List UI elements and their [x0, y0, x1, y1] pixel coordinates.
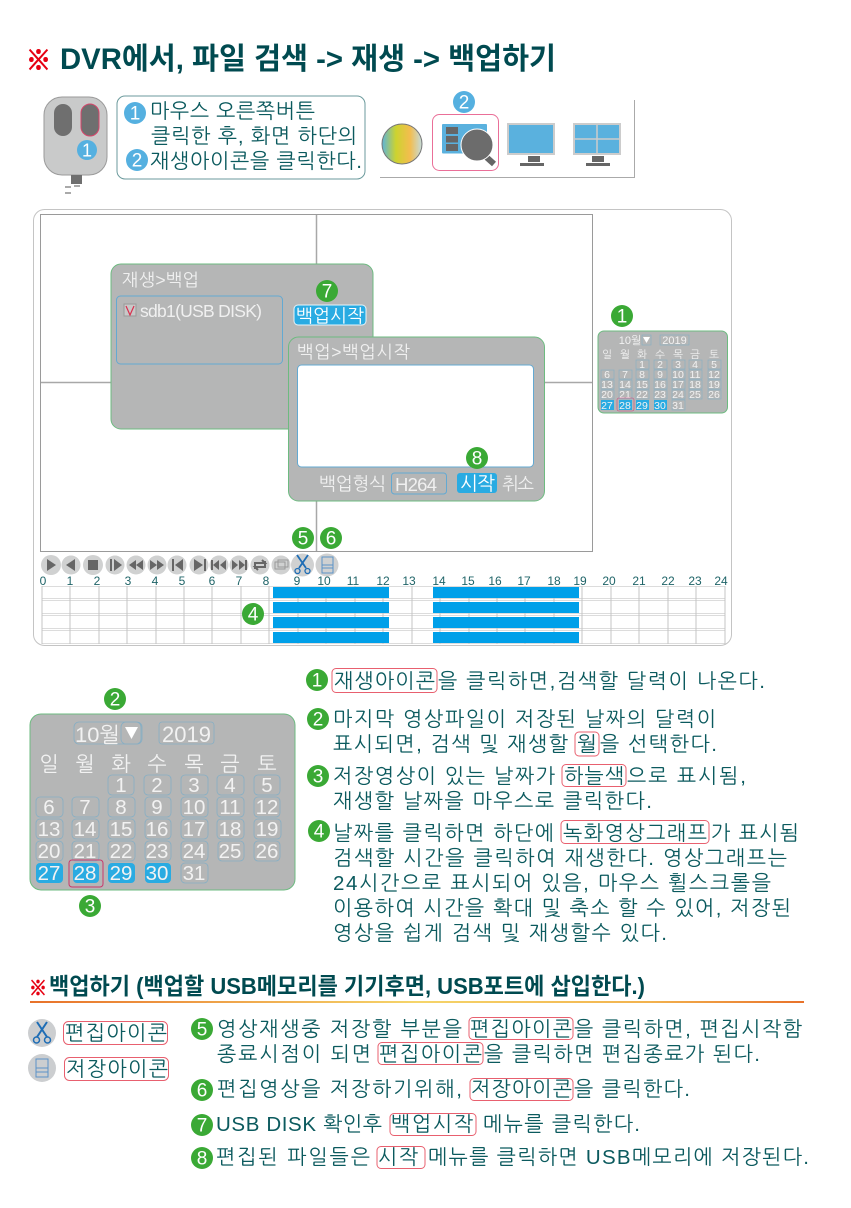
calendar: large: 29 — [110, 862, 132, 885]
panel: backup start dialog: H264 — [395, 474, 437, 495]
text block: step 3: 저장영상이 있는 날짜가 — [333, 765, 556, 788]
calendar: small: 27 — [601, 400, 613, 412]
calendar: large: 26 — [256, 840, 278, 863]
calendar: large: 목 — [184, 753, 204, 776]
badge 2 — [104, 688, 126, 710]
text block: step 2: 마지막 영상파일이 저장된 날짜의 달력이 — [333, 708, 716, 731]
text block: step 5: 을 클릭하면, 편집시작함 — [574, 1018, 803, 1041]
calendar: small: 21 — [619, 389, 631, 401]
calendar: small: 13 — [601, 379, 613, 391]
panel: playback icon bar — [380, 91, 634, 178]
legend: save icon — [28, 1054, 168, 1082]
text block: step 4 — [308, 820, 799, 945]
text block: step 8: 8 — [197, 1148, 207, 1170]
calendar: large: 수 — [147, 753, 167, 776]
calendar: large: 17 — [183, 818, 205, 841]
panel: backup start dialog: 시작 — [460, 474, 495, 495]
chart: hour scale: 10 — [317, 574, 331, 588]
chart: recording timeline — [42, 586, 725, 644]
callout: mouse instruction: 2 — [132, 150, 142, 172]
calendar: large: 23 — [146, 840, 168, 863]
calendar: small: 16 — [654, 379, 666, 391]
calendar: large: 6 — [43, 796, 55, 819]
icon: quad monitor — [574, 124, 620, 166]
text block: step 4: 4 — [314, 822, 325, 842]
calendar: large: 19 — [256, 818, 278, 841]
chart: hour scale: 2 — [94, 574, 101, 588]
text block: step 1 — [306, 668, 765, 693]
calendar: small: 17 — [672, 379, 684, 391]
calendar: small: 2 — [657, 359, 663, 371]
text block: step 3: 으로 표시됨, — [627, 765, 746, 788]
chart: hour scale: 12 — [376, 574, 390, 588]
calendar: small: 12 — [708, 369, 720, 381]
calendar: small: 15 — [636, 379, 648, 391]
badge 6: 6 — [326, 528, 336, 550]
calendar: large: 14 — [74, 818, 96, 841]
badge 5: 5 — [298, 528, 308, 550]
badge 2: 2 — [110, 690, 120, 710]
callout: mouse instruction: 마우스 오른쪽버튼 — [150, 100, 315, 123]
panel: backup start dialog: 취소 — [502, 474, 534, 494]
calendar: small: 20 — [601, 389, 613, 401]
calendar: large: 31 — [183, 862, 205, 885]
panel: backup dialog: 7 — [322, 282, 332, 302]
text block: step 6: 6 — [197, 1080, 207, 1102]
text block: step 4: 24시간으로 표시되어 있음, 마우스 휠스크롤을 — [333, 872, 771, 895]
calendar: large: 15 — [110, 818, 132, 841]
chart: hour scale: 13 — [402, 574, 416, 588]
calendar: large: 3 — [188, 774, 200, 797]
text block: step 1: 1 — [312, 670, 322, 692]
calendar: small: 토 — [709, 349, 719, 361]
calendar: large: 12 — [256, 796, 278, 819]
text block: step 4: 녹화영상그래프 — [563, 822, 707, 845]
chart: hour scale: 22 — [661, 574, 675, 588]
calendar: large: 20 — [38, 840, 60, 863]
calendar: large: 21 — [74, 840, 96, 863]
calendar: large: 금 — [220, 753, 240, 776]
chart: hour scale: 11 — [347, 574, 360, 588]
calendar: large: 5 — [261, 774, 273, 797]
chart: hour scale: 3 — [125, 574, 132, 588]
calendar: small: 29 — [636, 400, 648, 412]
callout: mouse instruction: 재생아이콘을 클릭한다. — [150, 150, 362, 173]
panel: backup dialog — [111, 264, 373, 429]
text block: step 4: 날짜를 클릭하면 하단에 — [333, 822, 554, 845]
panel: backup start dialog: 백업형식 — [319, 474, 386, 494]
panel: backup start dialog: 8 — [472, 448, 482, 470]
text block: step 5: 영상재생중 저장할 부분을 — [217, 1018, 462, 1041]
calendar: small: 14 — [619, 379, 631, 391]
panel: backup start dialog: 백업>백업시작 — [297, 342, 410, 362]
panel: backup dialog: sdb1(USB DISK) — [140, 301, 262, 321]
calendar: large: 16 — [146, 818, 168, 841]
chart: hour scale: 24 — [714, 574, 728, 588]
chart: hour scale: 17 — [517, 574, 531, 588]
chart: hour scale: 6 — [209, 574, 216, 588]
legend: edit icon: 편집아이콘 — [65, 1022, 167, 1045]
calendar: large: 2 — [151, 774, 163, 797]
calendar: small — [598, 331, 728, 413]
legend: edit icon — [28, 1019, 168, 1047]
calendar: small: 9 — [657, 369, 663, 381]
text block: step 4: 이용하여 시간을 확대 및 축소 할 수 있어, 저장된 — [333, 897, 791, 920]
calendar: small: 금 — [690, 349, 700, 361]
badge 3: 3 — [85, 896, 95, 918]
chart: hour scale: 19 — [573, 574, 587, 588]
calendar: small: 화 — [637, 349, 647, 361]
chart: hour scale: 7 — [236, 574, 243, 588]
title: DVR에서, 파일 검색 -> 재생 -> 백업하기 — [60, 43, 556, 76]
badge 1 — [611, 305, 633, 328]
text block: step 3: 하늘색 — [564, 765, 624, 788]
text block: step 4: 가 표시됨 — [711, 822, 799, 845]
chart: recording timeline: 4 — [248, 604, 259, 626]
chart: hour scale: 5 — [179, 574, 186, 588]
calendar: large: 27 — [38, 862, 60, 885]
icon: color wheel — [382, 124, 422, 164]
calendar: small: 24 — [672, 389, 684, 401]
calendar: large: 8 — [115, 796, 127, 819]
chart: hour scale: 1 — [67, 574, 74, 588]
text block: step 4: 검색할 시간을 클릭하여 재생한다. 영상그래프는 — [333, 847, 787, 870]
text block: step 2: 2 — [313, 710, 323, 730]
calendar: small: 4 — [692, 359, 698, 371]
text block: step 2: 을 선택한다. — [600, 733, 717, 756]
panel: DVR screen — [34, 210, 732, 646]
calendar: small: 26 — [708, 389, 720, 401]
text block: step 6: 편집영상을 저장하기위해, — [217, 1078, 462, 1101]
calendar: large: 월 — [75, 753, 95, 776]
calendar: small: 10월 — [619, 334, 641, 347]
calendar: small: 19 — [708, 379, 720, 391]
calendar: large: 9 — [151, 796, 163, 819]
badge 1: 1 — [617, 306, 627, 328]
calendar: small: 8 — [639, 369, 645, 381]
calendar: small: 1 — [639, 359, 645, 371]
chart: hour scale: 15 — [461, 574, 475, 588]
badge 5 — [292, 527, 314, 550]
calendar: small: 2019 — [662, 335, 687, 347]
badge 6 — [320, 527, 342, 550]
chart: hour scale: 20 — [602, 574, 616, 588]
badge 2 — [453, 91, 475, 114]
heading: backup: 백업하기 (백업할 USB메모리를 기기후면, USB포트에 삽입한다.) — [49, 973, 645, 999]
calendar: small: 5 — [711, 359, 717, 371]
panel: backup dialog: 백업시작 — [296, 306, 364, 326]
calendar: large: 18 — [219, 818, 241, 841]
icon: mouse: 1 — [82, 140, 92, 160]
calendar: large: 화 — [111, 753, 131, 776]
panel: backup dialog: 재생>백업 — [122, 270, 199, 290]
toolbar: playback controls — [41, 554, 338, 576]
text block: step 3: 재생할 날짜을 마우스로 클릭한다. — [333, 790, 652, 813]
text block: step 5: 편집아이콘 — [470, 1018, 572, 1041]
callout: mouse instruction: 클릭한 후, 화면 하단의 — [151, 125, 357, 148]
chart: hour scale: 21 — [632, 574, 646, 588]
chart: hour scale: 14 — [432, 574, 446, 588]
text block: step 5 — [191, 1018, 803, 1066]
calendar: large: 4 — [224, 774, 236, 797]
text block: step 1: 을 클릭하면,검색할 달력이 나온다. — [438, 670, 765, 693]
calendar: large: 30 — [146, 862, 168, 885]
calendar: small: 3 — [675, 359, 681, 371]
chart: hour scale: 9 — [294, 574, 301, 588]
chart: hour scale: 4 — [152, 574, 159, 588]
calendar: small: 7 — [622, 369, 628, 381]
text block: step 4: 영상을 쉽게 검색 및 재생할수 있다. — [333, 922, 667, 945]
calendar: large: 10 — [183, 796, 205, 819]
badge 3 — [79, 895, 101, 918]
text block: step 6: 저장아이콘 — [471, 1078, 572, 1101]
text block: step 7: 백업시작 — [391, 1113, 474, 1136]
calendar: small: 월 — [620, 349, 630, 361]
calendar: small: 11 — [690, 369, 701, 381]
icon: search playback — [432, 114, 498, 170]
calendar: large: 7 — [79, 796, 91, 819]
calendar: large: 토 — [257, 753, 277, 776]
calendar: small: 수 — [655, 349, 665, 361]
text block: step 8: 시작 — [378, 1146, 419, 1169]
text block: step 3 — [307, 764, 746, 813]
calendar: large: 11 — [219, 796, 241, 819]
panel: backup start dialog — [288, 337, 544, 501]
icon: mouse — [44, 97, 107, 193]
text block: step 8: 편집된 파일들은 — [216, 1146, 370, 1169]
calendar: small: 31 — [672, 400, 684, 412]
calendar: small: 22 — [636, 389, 648, 401]
text block: step 5: 5 — [197, 1020, 207, 1040]
text block: step 5: 편집아이콘 — [379, 1043, 482, 1066]
calendar: small: 18 — [689, 379, 701, 391]
heading: backup: ※ — [29, 978, 47, 1000]
text block: step 8: 메뉴를 클릭하면 USB메모리에 저장된다. — [428, 1146, 809, 1169]
calendar: small: 25 — [689, 389, 701, 401]
chart: hour scale: 18 — [547, 574, 561, 588]
text block: step 5: 을 클릭하면 편집종료가 된다. — [484, 1043, 760, 1066]
legend: save icon: 저장아이콘 — [66, 1058, 168, 1081]
calendar: large: 25 — [219, 840, 241, 863]
chart: hour scale: 16 — [488, 574, 502, 588]
calendar: small: 일 — [602, 349, 612, 361]
text block: step 2: 표시되면, 검색 및 재생할 — [333, 733, 569, 756]
callout: mouse instruction: 1 — [130, 104, 140, 124]
calendar: large: 1 — [115, 774, 127, 797]
text block: step 8 — [191, 1146, 809, 1170]
calendar: small: 6 — [604, 369, 610, 381]
calendar: large: 2019 — [162, 722, 211, 747]
text block: step 3: 3 — [313, 766, 323, 788]
text block: step 5: 종료시점이 되면 — [217, 1043, 371, 1066]
chart: hour scale: 8 — [263, 574, 270, 588]
calendar: small: 28 — [619, 400, 631, 412]
chart: hour scale — [40, 574, 728, 588]
badge 2: 2 — [459, 92, 469, 114]
calendar: large: 일 — [39, 753, 59, 776]
text block: step 6 — [191, 1078, 690, 1102]
calendar: large: 28 — [74, 862, 96, 885]
text block: step 7: 7 — [197, 1116, 207, 1136]
chart: hour scale: 0 — [40, 574, 47, 588]
calendar: small: 30 — [654, 400, 666, 412]
calendar: large: 13 — [38, 818, 60, 841]
text block: step 6: 을 클릭한다. — [574, 1078, 690, 1101]
calendar: large: 24 — [183, 840, 205, 863]
calendar: small: 23 — [654, 389, 666, 401]
chart: hour scale: 23 — [688, 574, 702, 588]
text block: step 7: 메뉴를 클릭한다. — [483, 1113, 640, 1136]
calendar: large — [30, 714, 295, 890]
text block: step 1: 재생아이콘 — [334, 670, 435, 693]
text block: step 7: USB DISK 확인후 — [216, 1113, 382, 1136]
calendar: small: 목 — [673, 349, 683, 361]
calendar: small: 10 — [672, 369, 684, 381]
calendar: large: 22 — [110, 840, 132, 863]
heading: backup — [29, 973, 804, 1003]
text block: step 7 — [191, 1113, 640, 1136]
callout: mouse instruction — [117, 96, 365, 179]
title: ※ — [26, 46, 51, 76]
text block: step 2: 월 — [577, 733, 597, 756]
calendar: large: 10월 — [75, 724, 120, 747]
icon: single monitor — [508, 124, 554, 166]
text block: step 2 — [307, 708, 717, 756]
